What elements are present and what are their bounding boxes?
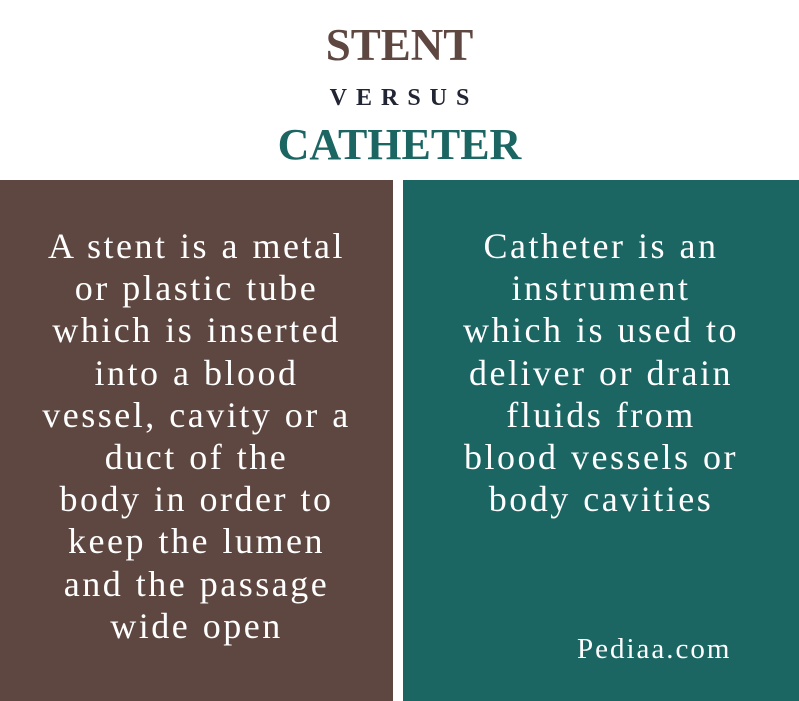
logo: Pediaa.com: Pediaa.com <box>577 633 731 665</box>
text: stent definition: which is inserted <box>52 310 341 350</box>
text: stent definition: or plastic tube <box>75 268 318 308</box>
text: catheter definition: instrument <box>512 268 690 308</box>
text: catheter definition: Catheter is an <box>484 226 718 266</box>
title: catheter: CATHETER <box>278 120 521 169</box>
text: stent definition: duct of the <box>105 437 288 477</box>
text: stent definition: into a blood <box>94 353 298 393</box>
text: stent definition: wide open <box>110 606 283 646</box>
text: stent definition: keep the lumen <box>68 521 325 561</box>
text: stent definition: body in order to <box>60 479 333 519</box>
text: stent definition <box>42 226 351 646</box>
panel: catheter <box>403 180 799 701</box>
text: stent definition: A stent is a metal <box>48 226 345 266</box>
text: stent definition: and the passage <box>64 564 329 604</box>
panel: stent <box>0 180 393 701</box>
title: stent: STENT <box>326 20 473 70</box>
text: stent definition: vessel, cavity or a <box>42 395 351 435</box>
text: catheter definition: body cavities <box>489 479 713 519</box>
text: catheter definition <box>463 226 739 519</box>
text: catheter definition: which is used to <box>463 310 739 350</box>
text: catheter definition: deliver or drain <box>469 353 733 393</box>
text: catheter definition: fluids from <box>506 395 696 435</box>
title: versus: VERSUS <box>330 85 478 111</box>
text: catheter definition: blood vessels or <box>464 437 738 477</box>
